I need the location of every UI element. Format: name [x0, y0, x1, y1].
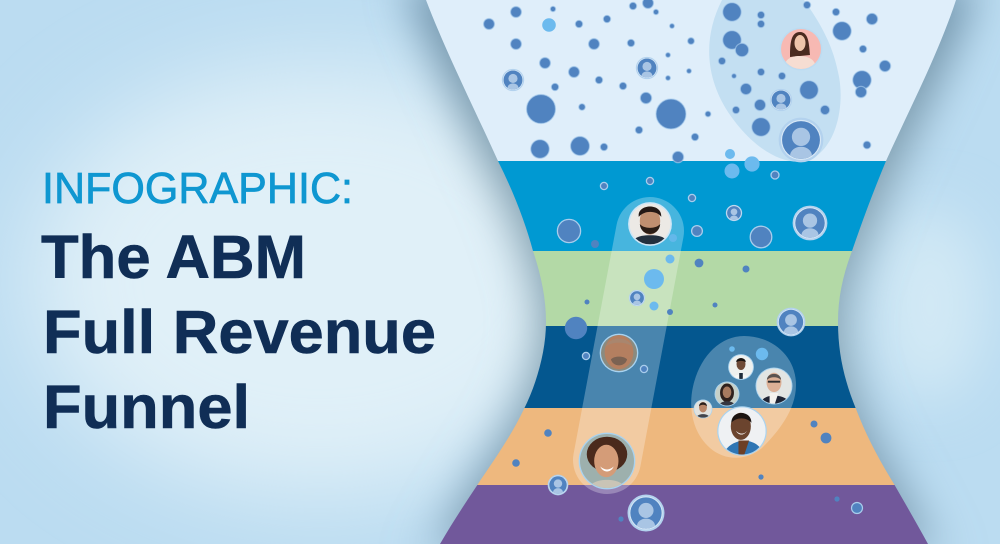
- band: blue: [498, 161, 886, 251]
- portrait: smiling man in blue jacket: [717, 406, 767, 456]
- funnel shadow: [426, 0, 956, 544]
- portrait: bearded man: [628, 202, 672, 246]
- heading line: Funnel: Funnel: [43, 373, 250, 441]
- highlight: buying group cluster: [691, 336, 796, 458]
- icon: user 10: [628, 495, 664, 533]
- icon: user 1: [502, 69, 524, 92]
- icon: user 9: [548, 475, 568, 496]
- icon: user 2: [636, 57, 658, 80]
- portrait: woman with curly hair: [579, 433, 635, 489]
- icon: user 4 large: [779, 118, 823, 164]
- funnel: [426, 0, 956, 544]
- portrait: man with white shirt: [728, 354, 754, 380]
- icon: user 3: [770, 89, 792, 112]
- dots: light blue: [542, 18, 768, 360]
- dots: ringed circles in blue band: [557, 171, 779, 373]
- dot: ringed lower right: [852, 502, 862, 514]
- dots: solid circles in middle bands: [512, 240, 840, 522]
- icon: user 8: [777, 308, 805, 338]
- icon: user 7: [629, 290, 645, 307]
- portrait: woman with pink background: [781, 29, 821, 69]
- icon: user 6: [793, 206, 827, 242]
- band: top of funnel: [426, 0, 956, 162]
- heading line: Full Revenue: Full Revenue: [43, 298, 436, 366]
- dots: top of funnel: [484, 0, 891, 163]
- band: purple: [440, 485, 928, 544]
- icon: user 5: [726, 205, 742, 222]
- title: [41, 164, 436, 441]
- band: orange: [478, 408, 894, 485]
- portrait: small man: [694, 400, 712, 418]
- band: navy: [524, 326, 856, 408]
- portrait: woman with glasses: [715, 382, 739, 406]
- highlight: account journey capsule: [607, 231, 650, 460]
- highlight: top prospect cluster: [709, 0, 841, 162]
- portrait: older man: [600, 334, 638, 372]
- band: green: [533, 251, 852, 326]
- heading line: The ABM: The ABM: [41, 223, 306, 291]
- eyebrow: INFOGRAPHIC: INFOGRAPHIC:: [42, 164, 353, 213]
- portrait: man with glasses and suit: [756, 368, 792, 404]
